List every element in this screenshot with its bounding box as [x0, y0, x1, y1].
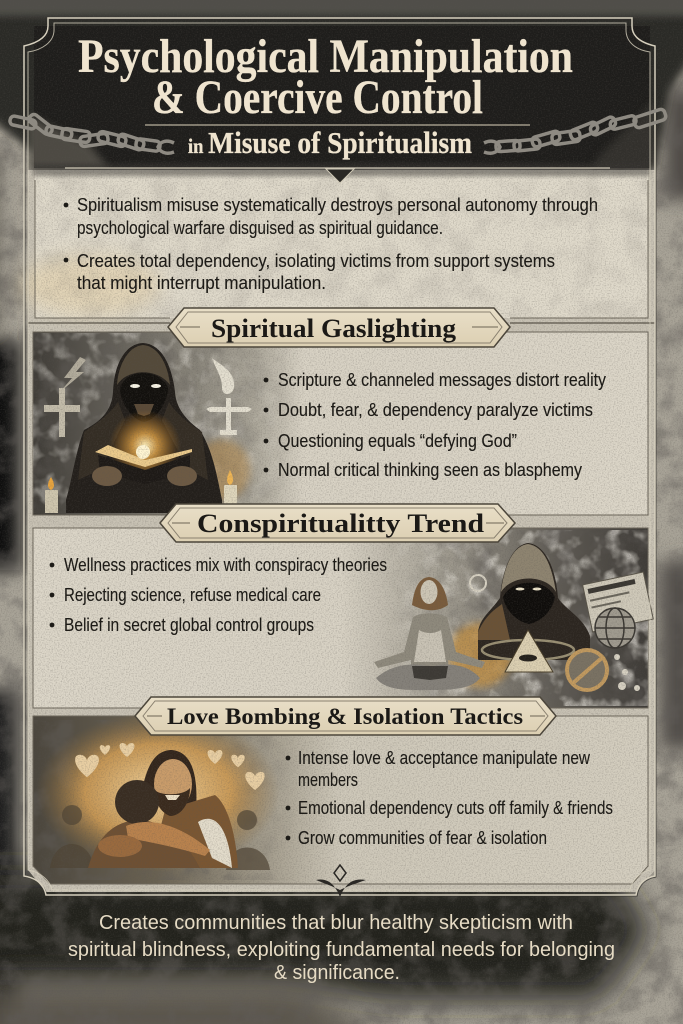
header band: [0, 0, 683, 170]
ornament: header point: [65, 168, 610, 183]
banner: spiritual gaslighting: [168, 308, 510, 347]
text: conspirituality bullets: Wellness practices mix with conspiracy theories: [64, 554, 387, 575]
text: gaslighting bullets: [264, 369, 607, 480]
banner: conspirituality trend: [160, 504, 515, 542]
book: [95, 445, 192, 467]
icon: cross and lightning left: [44, 357, 86, 437]
footer text: spiritual blindness, exploiting fundamental needs for belonging: [68, 939, 615, 961]
illustration: embrace with hearts: [36, 712, 280, 872]
child back: [88, 820, 200, 868]
text: love bombing bullets: Intense love & acceptance manipulate new: [298, 747, 591, 768]
arms: [126, 822, 210, 856]
panel: intro: [20, 163, 655, 323]
mottled panel texture: [33, 172, 648, 880]
text: love bombing bullets: Grow communities of fear & isolation: [298, 827, 547, 848]
text: love bombing bullets: Emotional dependency cuts off family & friends: [298, 797, 613, 818]
man hair: [142, 750, 196, 810]
illustration: hooded figure with glowing book: [44, 343, 252, 513]
footer text: Creates communities that blur healthy skepticism with: [99, 912, 573, 934]
man robe: [150, 795, 238, 868]
no symbol: [567, 650, 607, 690]
footer text: [68, 912, 615, 984]
text: conspirituality bullets: [50, 554, 387, 635]
banner: spiritual gaslighting: Spiritual Gaslighting: [211, 314, 456, 343]
text: intro bullets: psychological warfare disguised as spiritual guidance.: [77, 217, 443, 238]
eye symbol: [470, 575, 486, 591]
figure body: [66, 343, 222, 513]
text: gaslighting bullets: Doubt, fear, & dependency paralyze victims: [278, 399, 593, 420]
text: intro bullets: Creates total dependency, isolating victims from support systems: [77, 250, 555, 271]
rings: [482, 640, 574, 660]
title: & Coercive Control: [152, 71, 483, 124]
pyramid with eye: [505, 630, 553, 672]
ornament: bottom diamond and wings: [316, 865, 366, 897]
hooded figure: [478, 543, 590, 660]
child head: [115, 780, 159, 824]
frame: outer ornamental border: [24, 18, 656, 896]
eyes: [516, 588, 542, 590]
footer text: & significance.: [274, 962, 400, 984]
beard: [155, 788, 190, 816]
text: intro bullets: [64, 194, 598, 293]
candles: [45, 470, 237, 513]
text: gaslighting bullets: Questioning equals “defying God”: [278, 430, 517, 451]
text: conspirituality bullets: Rejecting science, refuse medical care: [64, 584, 321, 605]
text: gaslighting bullets: Scripture & channeled messages distort reality: [278, 369, 607, 390]
text: love bombing bullets: [286, 747, 613, 848]
text: intro bullets: that might interrupt manipulation.: [77, 272, 326, 293]
text: love bombing bullets: members: [298, 769, 358, 790]
globe: [595, 608, 635, 648]
woman: [412, 577, 448, 610]
warm embers: [194, 440, 250, 500]
title: Psychological Manipulation: [78, 30, 573, 83]
silhouettes: [50, 805, 270, 870]
face: [120, 373, 168, 422]
glow: [448, 623, 512, 687]
banner: conspirituality trend: Conspiritualitty Trend: [197, 509, 485, 538]
warm glow: [36, 712, 280, 872]
divider under title: [145, 124, 530, 126]
document: [583, 572, 653, 632]
panel: conspirituality background: [33, 528, 648, 708]
text: conspirituality bullets: Belief in secret global control groups: [64, 614, 314, 635]
text: gaslighting bullets: Normal critical thinking seen as blasphemy: [278, 459, 583, 480]
chain: right: [484, 108, 667, 153]
panel: love bombing background: [33, 716, 648, 884]
hearts: [75, 743, 265, 790]
illustration: meditating woman and conspiracy symbols: [374, 543, 653, 691]
chain: left: [9, 113, 174, 153]
frame band fill: [28, 170, 655, 892]
title: [78, 30, 573, 124]
stars: [614, 654, 640, 691]
text: intro bullets: Spiritualism misuse systematically destroys personal autonomy through: [77, 194, 598, 215]
banner: love bombing and isolation tactics: [135, 697, 556, 735]
hands: [92, 466, 197, 486]
man face: [154, 759, 192, 809]
icon: cross and flame right: [206, 358, 252, 435]
banner: love bombing and isolation tactics: Love Bombing & Isolation Tactics: [167, 704, 523, 729]
subtitle: in Misuse of Spiritualism: [188, 125, 472, 160]
eyes: [130, 384, 161, 388]
sleeve: [198, 819, 232, 868]
panel: spiritual gaslighting background: [33, 332, 648, 515]
glow: [109, 410, 181, 482]
